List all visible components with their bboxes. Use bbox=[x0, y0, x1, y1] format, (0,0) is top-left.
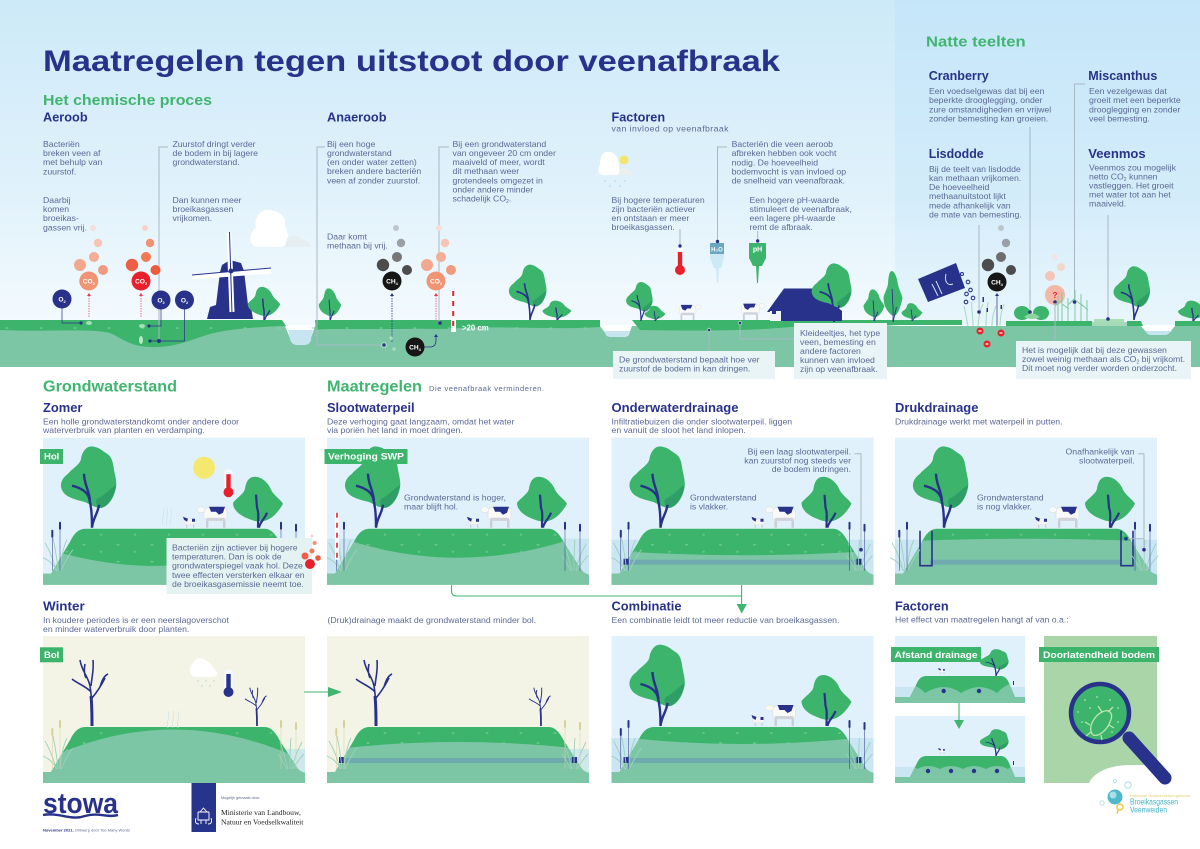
icon: co2 bubbles: CO bbox=[430, 278, 440, 286]
text: dan kunnen meer broeikasgassen vrijkomen: broeikasgassen bbox=[172, 204, 234, 214]
panel: slootwaterpeil bbox=[327, 438, 589, 585]
label: bol: Bol bbox=[44, 650, 59, 661]
callout: kleideeltjes: Kleideeltjes, het type bbox=[800, 328, 880, 338]
icon: co2 bubbles: 2 bbox=[440, 281, 443, 286]
callout: bacterien actiever: de broeikasgasemissie neemt toe. bbox=[172, 579, 304, 589]
panel: onderwaterdrainage bbox=[612, 438, 874, 585]
callout: kleideeltjes bbox=[738, 321, 887, 379]
block: veenmos: met water tot aan het bbox=[1089, 190, 1171, 200]
subheading: van invloed op veenafbraak bbox=[612, 123, 729, 133]
panel: winter bol bbox=[43, 636, 305, 783]
callout: kleideeltjes: andere factoren bbox=[800, 346, 861, 356]
block: lisdodde bbox=[929, 146, 1022, 312]
block: miscanthus: drooglegging en zonder bbox=[1089, 104, 1180, 114]
callout: kleideeltjes: zijn op veenafbraak. bbox=[800, 364, 878, 374]
callout: zuurstof dringt verder: de bodem in bij lagere bbox=[172, 148, 258, 158]
label: doorlatendheid bodem: Doorlatendheid bodem bbox=[1043, 650, 1155, 661]
text: ph-waarde: remt de afbraak. bbox=[750, 222, 813, 232]
label: doorlatendheid bodem bbox=[1039, 647, 1159, 662]
callout: methaan omgezet: van ongeveer 20 cm onder bbox=[452, 148, 556, 158]
icon: farm and trees bbox=[626, 263, 922, 322]
block: miscanthus bbox=[1074, 68, 1181, 302]
block: miscanthus: veel bemesting. bbox=[1089, 114, 1150, 124]
callout: bij een hoge grondwaterstand: grondwaterstand bbox=[327, 148, 392, 158]
logo: stowa: stowa bbox=[43, 788, 119, 820]
heading: winter bbox=[43, 599, 230, 634]
callout: laag slootwaterpeil: Bij een laag slootwaterpeil. bbox=[748, 447, 851, 457]
callout: methaan omgezet: onder andere minder bbox=[452, 184, 533, 194]
label: verhoging swp bbox=[324, 449, 408, 464]
callout: laag slootwaterpeil bbox=[744, 446, 863, 552]
icon: cloud bbox=[190, 658, 217, 687]
icon: o2 bubbles: 2 bbox=[63, 299, 66, 304]
text: bacterien breken veen af: zuurstof. bbox=[43, 166, 76, 176]
credit line: November 2021. Ontwerp door Too Many Words bbox=[43, 828, 130, 832]
heading: factoren: Factoren bbox=[612, 110, 665, 125]
text: hogere temperaturen: zijn bacteriën actiever bbox=[612, 204, 696, 214]
icon: co2 bubbles light bbox=[74, 225, 108, 317]
heading: drukdrainage: Drukdrainage bbox=[895, 400, 978, 415]
callout: bij een hoge grondwaterstand: veen af zonder zuurstof. bbox=[327, 175, 420, 185]
block: veenmos: 2 bbox=[1124, 177, 1127, 183]
block: cranberry: zonder bemesting kan groeien. bbox=[929, 114, 1048, 124]
label: afstand drainage: Afstand drainage bbox=[894, 650, 978, 661]
callout: bodemvocht: de snelheid van veenafbraak. bbox=[732, 176, 845, 186]
icon: trees right bbox=[1114, 266, 1200, 321]
callout: bij een hoge grondwaterstand: breken andere bacteriën bbox=[327, 166, 421, 176]
text: dan kunnen meer broeikasgassen vrijkomen: Dan kunnen meer bbox=[172, 195, 242, 205]
icon: ph-meter bbox=[749, 231, 766, 283]
heading: onderwaterdrainage: Onderwaterdrainage bbox=[612, 400, 738, 415]
label: hol bbox=[40, 449, 63, 464]
callout: methaan omgezet: . bbox=[509, 194, 511, 204]
arrow: afstand drainage omlaag bbox=[954, 703, 964, 729]
block: cranberry: Een voedselgewas dat bij een bbox=[929, 86, 1045, 96]
callout: bij een hoge grondwaterstand: Bij een hoge bbox=[327, 139, 375, 149]
callout: methaan omgezet bbox=[439, 139, 556, 322]
block: veenmos bbox=[1088, 146, 1177, 319]
panel: winter drainage bbox=[327, 636, 589, 783]
icon: vergrootglas bbox=[1071, 684, 1165, 778]
icon: peilschaal bbox=[335, 513, 339, 560]
icon: ch4 bubbles: CH bbox=[991, 280, 1001, 286]
callout: laag slootwaterpeil: de bodem indringen. bbox=[772, 464, 851, 474]
icon: thermometer bbox=[224, 469, 234, 497]
callout: zuurstof dringt verder bbox=[159, 139, 258, 341]
callout: zuurstof dringt verder: Zuurstof dringt verder bbox=[172, 139, 256, 149]
logo: broeikasgassen veenweiden: Broeikasgassen bbox=[1130, 798, 1178, 806]
label: bol bbox=[40, 647, 63, 662]
arrow: winter naar drainage bbox=[304, 687, 342, 697]
text: daarbij komen broeikasgassen vrij: Daarbij bbox=[43, 195, 71, 205]
text: grondwaterstand vlakker: is vlakker. bbox=[690, 502, 728, 512]
heading: factoren maatregelen: Factoren bbox=[895, 599, 949, 614]
heading: het chemische proces: Het chemische proces bbox=[43, 92, 212, 109]
heading: winter: In koudere periodes is er een neerslagoverschot bbox=[43, 615, 230, 625]
icon: mestzak bbox=[918, 263, 975, 304]
logo: broeikasgassen veenweiden: Nationaal Onderzoeksprogramma bbox=[1130, 794, 1190, 798]
callout: mogelijk weinig methaan: zowel weinig methaan als CO bbox=[1022, 354, 1185, 365]
callout: kleideeltjes: kunnen van invloed bbox=[800, 355, 875, 365]
heading: maatregelen: Maatregelen bbox=[327, 378, 422, 396]
panel: natte teelten background bbox=[895, 0, 1200, 325]
heading: drukdrainage: Drukdrainage werkt met waterpeil in putten. bbox=[895, 416, 1063, 426]
icon: cranberry bushes bbox=[1014, 306, 1049, 320]
callout: onafhankelijk: slootwaterpeil. bbox=[1079, 456, 1135, 466]
text: ministerie: Ministerie van Landbouw, bbox=[221, 808, 301, 817]
section: anaeroob bbox=[317, 110, 556, 356]
icon: ch4 in soil bbox=[381, 321, 442, 356]
heading: grondwaterstand: Grondwaterstand bbox=[43, 378, 177, 396]
icon: peilschaal bbox=[451, 290, 456, 332]
text: daarbij komen broeikasgassen vrij: komen bbox=[43, 204, 69, 214]
logo: broeikasgassen veenweiden: Veenweiden bbox=[1130, 806, 1167, 814]
callout: bodemvocht: afbreken hebben ook vocht bbox=[732, 148, 837, 158]
icon: o2 bubbles: 2 bbox=[186, 300, 189, 305]
panel: zomer hol bbox=[43, 438, 305, 585]
arrow: slootwaterpeil naar combinatie bbox=[452, 585, 747, 614]
callout: mogelijk weinig methaan: Het is mogelijk dat bij deze gewassen bbox=[1022, 345, 1167, 355]
icon: windmill bbox=[192, 232, 271, 319]
block: miscanthus: groeit met een beperkte bbox=[1089, 95, 1181, 105]
icon: cloud bbox=[250, 210, 311, 247]
logo: broeikasgassen veenweiden bbox=[1100, 780, 1190, 814]
heading: onderwaterdrainage: Infiltratiebuizen die onder slootwaterpeil. liggen bbox=[612, 416, 792, 426]
icon: veenmos bbox=[1094, 317, 1124, 322]
text: ph-waarde: Een hogere pH-waarde bbox=[750, 195, 839, 205]
heading: anaeroob: Anaeroob bbox=[327, 110, 387, 124]
icon: trees bbox=[248, 265, 572, 320]
text: dan kunnen meer broeikasgassen vrijkomen: vrijkomen. bbox=[172, 213, 212, 223]
callout: bodemvocht bbox=[718, 139, 846, 245]
block: veenmos: Veenmos zou mogelijk bbox=[1089, 162, 1177, 172]
text: ministerie: Natuur en Voedselkwaliteit bbox=[221, 818, 304, 826]
icon: lisdodde plants and roots bbox=[964, 297, 1004, 348]
block: cranberry: Cranberry bbox=[929, 68, 989, 83]
heading: combinatie: Een combinatie leidt tot meer reductie van broeikasgassen. bbox=[612, 615, 839, 625]
callout: bodemvocht: Bacteriën die veen aeroob bbox=[732, 139, 833, 149]
heading: winter: en minder waterverbruik door planten. bbox=[43, 624, 189, 634]
block: lisdodde: methaanuitstoot lijkt bbox=[929, 191, 1006, 201]
icon: co2 bubbles red bbox=[126, 225, 160, 317]
callout: bacterien actiever: grondwaterspiegel vaak hol. Deze bbox=[172, 560, 303, 570]
heading: winter: Winter bbox=[43, 599, 85, 614]
block: cranberry: beperkte drooglegging, onder bbox=[929, 95, 1043, 105]
block: miscanthus: Miscanthus bbox=[1088, 68, 1157, 83]
heading: onderwaterdrainage bbox=[612, 400, 792, 435]
text: hogere temperaturen: en ontstaan er meer bbox=[612, 213, 689, 223]
callout: bij een hoge grondwaterstand: (en onder water zetten) bbox=[327, 157, 417, 167]
panel: drukdrainage bbox=[890, 438, 1158, 585]
text: daar komt methaan bij vrij: methaan bij vrij. bbox=[327, 240, 388, 250]
callout: zuurstof dringt verder: grondwaterstand. bbox=[172, 157, 240, 167]
icon: co2 bubbles red: CO bbox=[135, 278, 145, 286]
icon: o2 bubbles: O bbox=[181, 298, 186, 304]
label: hol: Hol bbox=[44, 452, 59, 462]
callout: bacterien actiever bbox=[166, 538, 312, 594]
callout: kleideeltjes: veen, bemesting en bbox=[800, 337, 876, 347]
text: grondwaterstand hoger: Grondwaterstand is hoger, bbox=[404, 493, 506, 503]
heading: drukdrainage bbox=[895, 400, 1063, 426]
icon: miscanthus plants bbox=[1055, 290, 1088, 321]
icon: o2 bubbles: O bbox=[58, 296, 63, 304]
heading: zomer: waterverbruik van planten en verdamping. bbox=[42, 425, 205, 435]
icon: vochtmeter bbox=[710, 240, 724, 283]
icon: co2 bubbles zomer bbox=[302, 534, 321, 569]
icon: co2 bubbles red: 2 bbox=[145, 281, 148, 286]
heading: onderwaterdrainage: en vanuit de sloot het land inlopen. bbox=[612, 425, 746, 435]
text: hogere temperaturen: broeikasgassen. bbox=[612, 222, 675, 232]
icon: ch4 in soil: 4 bbox=[419, 347, 422, 352]
text: grondwaterstand hoger: maar blijft hol. bbox=[404, 502, 458, 512]
label: groter dan 20 cm: >20 cm bbox=[462, 324, 489, 332]
heading: aeroob: Aeroob bbox=[43, 110, 88, 124]
icon: ch4 bubbles bbox=[982, 225, 1016, 326]
heading: combinatie bbox=[612, 599, 839, 625]
callout: methaan omgezet: 2 bbox=[506, 199, 509, 205]
block: veenmos: Veenmos bbox=[1088, 146, 1146, 161]
title: Maatregelen tegen uitstoot door veenafbraak bbox=[43, 45, 780, 78]
callout: grondwaterstand bepaalt bbox=[613, 328, 775, 379]
icon: co2 bubbles light: CO bbox=[83, 278, 93, 286]
callout: bacterien actiever: temperaturen. Dan is ook de bbox=[172, 552, 282, 562]
icon: drainage putten bbox=[920, 531, 1133, 566]
icon: co2 bubbles light: 2 bbox=[93, 281, 96, 286]
callout: mogelijk weinig methaan: 2 bbox=[1136, 359, 1139, 365]
block: lisdodde: mede afhankelijk van bbox=[929, 201, 1011, 211]
heading: slootwaterpeil bbox=[327, 400, 514, 435]
icon: ch4 in soil: CH bbox=[409, 344, 419, 352]
icon: ch4 bubbles: CH bbox=[386, 278, 396, 286]
text: mogelijk gemaakt door: Mogelijk gemaakt door: bbox=[221, 796, 260, 800]
callout: grondwaterstand bepaalt: De grondwaterstand bepaalt hoe ver bbox=[619, 355, 760, 365]
heading: slootwaterpeil: via poriën het land in moet dringen. bbox=[327, 425, 463, 435]
block: miscanthus: Een vezelgewas dat bbox=[1089, 86, 1167, 96]
text: daarbij komen broeikasgassen vrij: gassen vrij. bbox=[43, 222, 87, 232]
text: daar komt methaan bij vrij: Daar komt bbox=[327, 232, 368, 242]
subheading: maatregelen: Die veenafbraak verminderen. bbox=[429, 384, 544, 393]
panel: afstand drainage groot bbox=[895, 636, 1025, 703]
icon: co2 bubbles bbox=[421, 225, 456, 322]
icon: question bubble: ? bbox=[1053, 291, 1058, 300]
text: bacterien breken veen af: breken veen af bbox=[43, 148, 101, 158]
text: grondwaterstand vlakker: Grondwaterstand bbox=[690, 493, 757, 503]
logo: rijksoverheid bbox=[192, 783, 216, 832]
block: lisdodde: Bij de teelt van lisdodde bbox=[929, 164, 1021, 174]
panel: doorlatendheid bodem bbox=[1044, 636, 1165, 783]
callout: methaan omgezet: grotendeels omgezet in bbox=[452, 175, 543, 185]
block: veenmos: maaiveld. bbox=[1089, 198, 1126, 208]
callout: methaan omgezet: maaiveld of meer, wordt bbox=[452, 157, 545, 167]
block: veenmos: kunnen bbox=[1127, 172, 1158, 182]
section: aeroob bbox=[43, 110, 572, 344]
panel: combinatie bbox=[612, 636, 874, 783]
heading: factoren maatregelen bbox=[895, 599, 1069, 624]
icon: ch4 bubbles: 4 bbox=[1001, 282, 1004, 287]
text: bacterien breken veen af: Bacteriën bbox=[43, 139, 80, 149]
text: grondwaterstand nog vlakker: is nog vlakker. bbox=[977, 502, 1032, 512]
text: ph-waarde: stimuleert de veenafbraak, bbox=[750, 204, 852, 214]
heading: factoren maatregelen: Het effect van maatregelen hangt af van o.a.: bbox=[895, 614, 1069, 624]
landscape ground bbox=[0, 320, 1200, 367]
heading: natte teelten: Natte teelten bbox=[926, 34, 1026, 51]
icon: cloud and sun bbox=[598, 152, 635, 187]
heading: zomer bbox=[42, 400, 239, 435]
label: afstand drainage bbox=[891, 647, 981, 662]
block: lisdodde: De hoeveelheid bbox=[929, 182, 990, 192]
block: lisdodde: kan methaan vrijkomen. bbox=[929, 173, 1021, 183]
text: bacterien breken veen af: met behulp van bbox=[43, 157, 103, 167]
callout: mogelijk weinig methaan: Dit moet nog verder worden onderzocht. bbox=[1022, 363, 1177, 373]
text: ph-waarde: een lagere pH-waarde bbox=[750, 213, 836, 223]
callout: bacterien actiever: Bacteriën zijn actiever bij hogere bbox=[172, 542, 298, 552]
icon: ph-meter: pH bbox=[753, 246, 762, 254]
callout: onafhankelijk bbox=[1066, 446, 1146, 552]
block: lisdodde: de mate van bemesting. bbox=[929, 210, 1022, 220]
block: veenmos: netto CO bbox=[1089, 172, 1158, 183]
callout: methaan omgezet: Bij een grondwaterstand bbox=[452, 139, 546, 149]
text: hogere temperaturen: Bij hogere temperaturen bbox=[612, 195, 705, 205]
text: daarbij komen broeikasgassen vrij: broeikas- bbox=[43, 213, 79, 223]
icon: ch4 bubbles: 4 bbox=[396, 281, 399, 286]
heading: zomer: Een holle grondwaterstandkomt onder andere door bbox=[43, 416, 239, 426]
heading: slootwaterpeil: Deze verhoging gaat langzaam, omdat het water bbox=[327, 416, 514, 426]
text: drukdrainage minder bol: (Druk)drainage maakt de grondwaterstand minder bol. bbox=[328, 615, 536, 625]
block: cranberry bbox=[929, 68, 1051, 312]
callout: onafhankelijk: Onafhankelijk van bbox=[1066, 447, 1135, 457]
heading: combinatie: Combinatie bbox=[612, 599, 682, 614]
icon: thermometer cold bbox=[224, 669, 234, 697]
heading: zomer: Zomer bbox=[43, 400, 82, 415]
callout: mogelijk weinig methaan bbox=[1016, 303, 1191, 379]
block: veenmos: vastleggen. Het groeit bbox=[1089, 180, 1174, 190]
label: verhoging swp: Verhoging SWP bbox=[328, 452, 405, 462]
icon: ch4 bubbles bbox=[377, 225, 412, 342]
callout: bodemvocht: bodemvocht is van invloed op bbox=[732, 166, 846, 176]
callout: bacterien actiever: twee effecten versterken elkaar en bbox=[172, 570, 305, 580]
block: cranberry: zure omstandigheden en vrijwel bbox=[929, 104, 1051, 114]
callout: methaan omgezet: schadelijk CO bbox=[452, 194, 511, 205]
block: lisdodde: Lisdodde bbox=[929, 146, 984, 161]
panel: afstand drainage klein bbox=[895, 716, 1025, 783]
callout: grondwaterstand bepaalt: zuurstof de bodem in kan dringen. bbox=[619, 364, 750, 374]
icon: question bubble bbox=[1045, 254, 1065, 305]
callout: bij een hoge grondwaterstand bbox=[317, 139, 421, 345]
section: factoren bbox=[598, 110, 922, 379]
section: natte teelten bbox=[918, 34, 1200, 379]
callout: mogelijk weinig methaan: bij vrijkomt. bbox=[1139, 354, 1185, 364]
callout: laag slootwaterpeil: kan zuurstof nog steeds ver bbox=[744, 456, 851, 466]
text: grondwaterstand nog vlakker: Grondwaterstand bbox=[977, 493, 1044, 503]
icon: sun bbox=[193, 457, 215, 479]
icon: o2 bubbles: 2 bbox=[162, 300, 165, 305]
icon: o2 bubbles: O bbox=[157, 298, 162, 304]
icon: thermometer bbox=[675, 229, 685, 275]
heading: slootwaterpeil: Slootwaterpeil bbox=[327, 400, 415, 415]
icon: o2 bubbles bbox=[52, 290, 194, 344]
callout: bodemvocht: nodig. De hoeveelheid bbox=[732, 157, 818, 167]
callout: methaan omgezet: dit methaan weer bbox=[452, 166, 519, 176]
icon: vochtmeter: H₂O bbox=[711, 248, 723, 254]
